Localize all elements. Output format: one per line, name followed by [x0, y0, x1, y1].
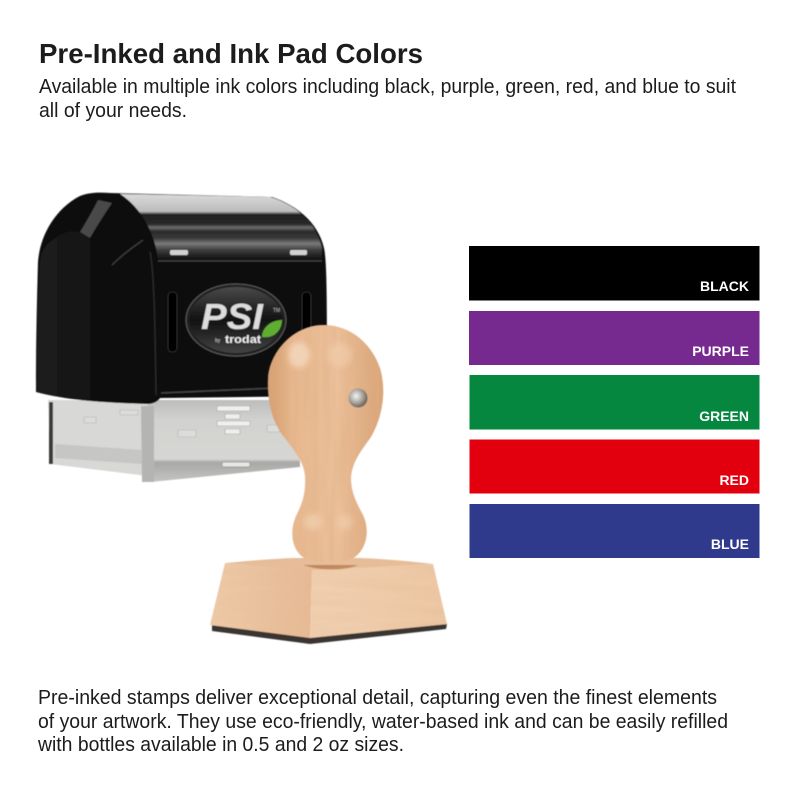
wood highlights	[288, 342, 310, 368]
swatch: purple: PURPLE	[692, 343, 749, 359]
description text: of your artwork. They use eco-friendly, water-based ink and can be easily refilled	[38, 711, 728, 733]
swatch: green: GREEN	[699, 408, 749, 424]
swatch: black	[469, 246, 760, 300]
lower edge highlight	[161, 387, 300, 393]
top window highlight	[120, 194, 322, 261]
wooden base	[205, 558, 450, 641]
PSI badge: by	[215, 338, 221, 344]
clear stamp base	[48, 400, 300, 482]
PSI badge: PSI	[201, 296, 264, 337]
PSI badge	[186, 284, 286, 356]
intro text: Available in multiple ink colors including black, purple, green, red, and blue to suit	[39, 76, 736, 98]
swatch: green	[470, 375, 760, 430]
side slots	[168, 292, 177, 352]
swatch: blue: BLUE	[711, 536, 749, 552]
wooden hand stamp illustration	[205, 322, 450, 644]
swatch: black: BLACK	[700, 278, 749, 294]
swatch: red: RED	[719, 472, 749, 488]
handle	[268, 325, 383, 562]
rubber pad	[212, 624, 447, 644]
leaf	[262, 320, 282, 337]
metal pin	[348, 388, 368, 408]
title: Pre-Inked and Ink Pad Colors	[39, 38, 423, 69]
swatch: blue	[470, 504, 760, 558]
black stamp body	[36, 193, 327, 404]
PSI badge: trodat	[225, 334, 261, 346]
PSI badge: TM	[273, 308, 280, 314]
left side panel	[37, 231, 108, 402]
description text: with bottles available in 0.5 and 2 oz sizes.	[37, 734, 404, 756]
description text: Pre-inked stamps deliver exceptional detail, capturing even the finest elements	[38, 687, 717, 709]
wood grain	[268, 369, 332, 559]
intro text: all of your needs.	[39, 100, 187, 122]
swatch: purple	[469, 311, 760, 365]
intro text	[39, 76, 736, 122]
swatch: red	[470, 440, 760, 494]
self-inking stamp illustration	[36, 193, 327, 482]
description text	[37, 687, 728, 756]
ink color swatches	[469, 246, 760, 558]
